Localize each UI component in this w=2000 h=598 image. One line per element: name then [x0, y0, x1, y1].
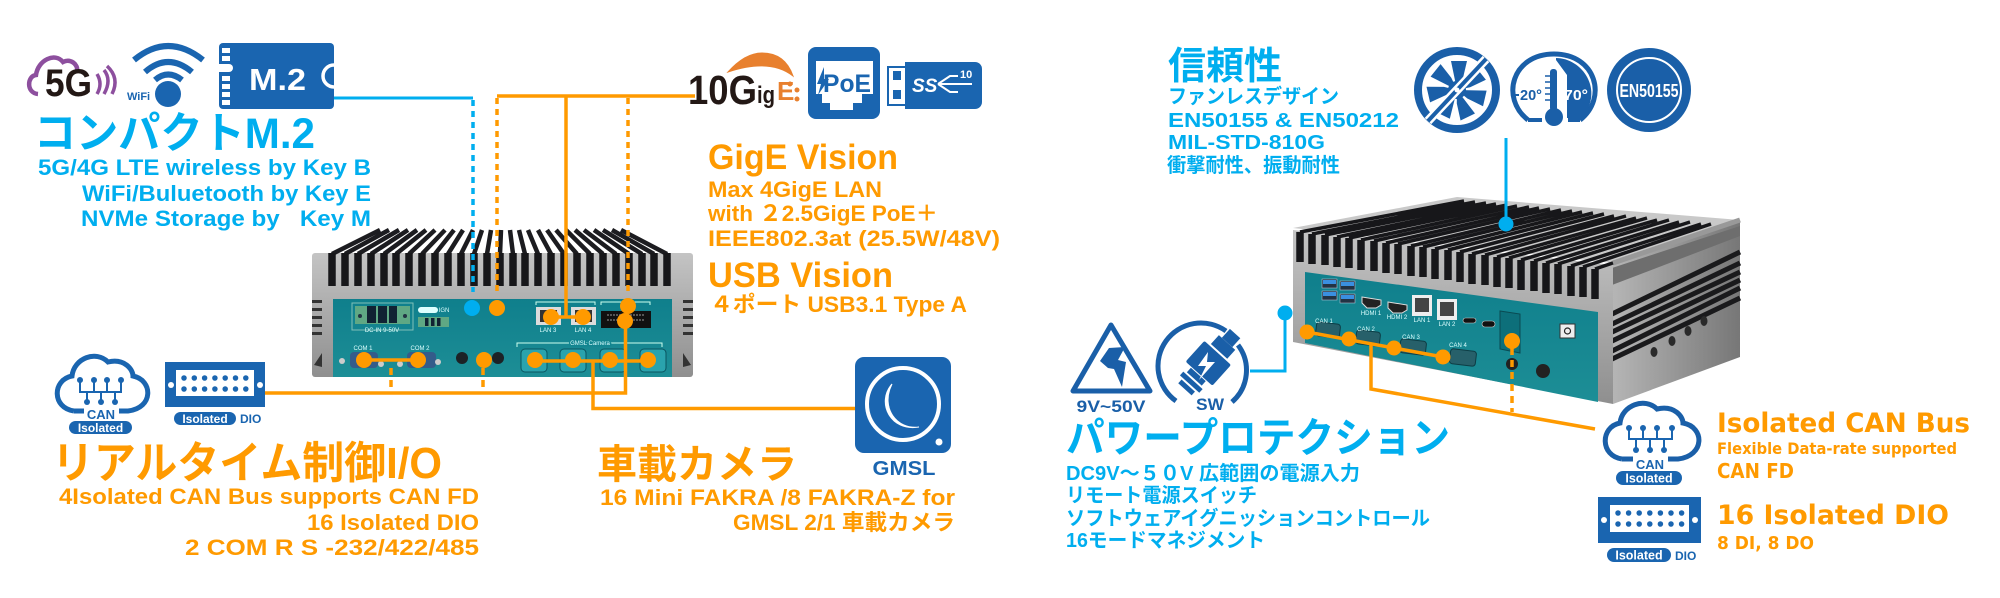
- text: power details: リモート電源スイッチ: [1066, 484, 1257, 507]
- text: IO details: [59, 484, 479, 560]
- text: reliability details: [1167, 84, 1399, 177]
- heading: automotive camera: 車載カメラ: [597, 443, 797, 487]
- icon: EN50155: [1607, 48, 1691, 132]
- icon: 5G: [29, 58, 115, 105]
- icon: USB 3: 10: [960, 69, 972, 81]
- buttons: [1506, 324, 1575, 378]
- LAN ports: [1412, 295, 1457, 320]
- GMSL ports: GMSL Camera: [570, 341, 611, 347]
- LAN ports: LAN 3: [540, 328, 557, 334]
- connector: CAN and DIO to right device: [1300, 324, 1595, 429]
- icon: temperature range: [1512, 54, 1595, 126]
- COM ports: COM 1: [353, 346, 373, 352]
- icon: 10GigE: E: [777, 76, 794, 106]
- icon: M.2 module: M.2: [249, 62, 306, 97]
- device side: [1613, 220, 1740, 404]
- device: right front view: CAN 1: [1315, 319, 1333, 325]
- icon: isolated CAN: Isolated: [78, 421, 123, 435]
- icon: isolated DIO: DIO: [240, 412, 261, 426]
- text: M.2 details: NVMe Storage by Key M: [81, 206, 371, 231]
- heading: real-time control IO: リアルタイム制御I/O: [52, 439, 442, 488]
- text: M.2 details: [38, 155, 371, 231]
- text: IO details: 2 COM R S -232/422/485: [185, 535, 479, 560]
- device: left rear view: [312, 230, 693, 377]
- device: right front view: LAN 2: [1439, 322, 1456, 328]
- icon: M.2 module: [219, 43, 334, 109]
- icon: isolated DIO: Isolated: [182, 412, 228, 426]
- icon: isolated CAN right: CAN: [1636, 457, 1664, 472]
- text: M.2 details: WiFi/Buluetooth by Key E: [82, 181, 371, 206]
- text: isolated DIO: 8 DI, 8 DO: [1717, 533, 1814, 554]
- text: USB details: ４ポート USB3.1 Type A: [710, 292, 967, 317]
- GMSL ports: [517, 341, 666, 372]
- text: isolated CAN bus: Flexible Data-rate supported: [1717, 439, 1957, 458]
- icon: software ignition switch: [1158, 322, 1248, 414]
- round buttons: [456, 352, 504, 364]
- ignition terminal: IGN: [439, 308, 449, 314]
- device: right front view: CAN 3: [1402, 335, 1420, 341]
- icon: voltage warning: 9V~50V: [1076, 397, 1146, 416]
- connector: real-time IO: [263, 321, 626, 393]
- text: camera details: [600, 485, 955, 535]
- icon: GMSL camera: [855, 357, 951, 480]
- connector: power to device: [1250, 306, 1292, 371]
- icon: isolated DIO right: Isolated: [1615, 548, 1663, 562]
- icon: 10GigE: 10G: [688, 67, 757, 113]
- ignition terminal: [418, 307, 449, 327]
- text: GigE details: Max 4GigE LAN: [708, 177, 882, 202]
- text: M.2 details: 5G/4G LTE wireless by Key B: [38, 155, 371, 180]
- text: reliability details: ファンレスデザイン: [1168, 84, 1339, 108]
- icon: fanless: [1418, 51, 1496, 129]
- text: IO details: 16 Isolated DIO: [307, 510, 479, 535]
- text: reliability details: MIL-STD-810G: [1168, 132, 1325, 154]
- icon: temperature range: 70°: [1564, 87, 1588, 104]
- device top surface: [1293, 197, 1740, 263]
- heading: GigE Vision: GigE Vision: [708, 138, 898, 177]
- device: right front view: CAN 2: [1357, 327, 1375, 333]
- LAN ports: [536, 302, 596, 334]
- icon: 5G: 5G: [45, 62, 92, 105]
- text: GigE details: with ２2.5GigE PoE＋: [707, 201, 938, 226]
- icon: isolated CAN right: Isolated: [1625, 472, 1673, 486]
- text: isolated CAN bus: CAN FD: [1717, 459, 1794, 483]
- heading: reliability: 信頼性: [1168, 46, 1282, 88]
- icon: 10GigE: ig: [757, 82, 775, 109]
- icon: isolated DIO right: [1598, 497, 1701, 563]
- text: reliability details: 衝撃耐性、振動耐性: [1167, 154, 1340, 177]
- connector: M.2 to device: [334, 98, 480, 316]
- text: power details: [1066, 462, 1430, 552]
- USB ports: [1322, 279, 1355, 303]
- LAN ports: LAN 4: [575, 328, 592, 334]
- icon: USB 3: SS: [912, 76, 938, 97]
- text: GigE details: IEEE802.3at (25.5W/48V): [708, 226, 1000, 251]
- CAN ports: [1315, 322, 1477, 367]
- icon: isolated CAN right: [1605, 403, 1699, 486]
- icon: isolated CAN: CAN: [87, 407, 115, 422]
- icon: GMSL camera: GMSL: [872, 458, 936, 480]
- text: power details: ソフトウェアイグニッションコントロール: [1066, 506, 1430, 530]
- text: camera details: GMSL 2/1 車載カメラ: [733, 510, 955, 535]
- connector: GMSL camera: [527, 352, 857, 408]
- icon: isolated CAN: [57, 356, 148, 435]
- icon: voltage warning: [1073, 325, 1150, 416]
- USB-C ports and slot: [1463, 311, 1520, 353]
- icon: software ignition switch: SW: [1196, 395, 1225, 414]
- text: isolated CAN bus: [1717, 408, 1970, 483]
- icon: PoE: [808, 47, 880, 119]
- icon: PoE: PoE: [823, 70, 871, 98]
- icon: isolated DIO right: DIO: [1675, 549, 1696, 563]
- text: IO details: 4Isolated CAN Bus supports CAN FD: [59, 484, 479, 509]
- heading: compact M.2: コンパクトM.2: [34, 110, 315, 158]
- device: right front view: LAN 1: [1414, 318, 1431, 324]
- connector: GigE to LAN and USB: [489, 96, 695, 329]
- text: power details: DC9V～５０V 広範囲の電源入力: [1066, 462, 1360, 485]
- connector: reliability to device: [1498, 138, 1514, 232]
- HDMI ports: [1362, 297, 1407, 313]
- device: right front view: HDMI 1: [1361, 311, 1382, 317]
- text: GigE details: [707, 177, 1000, 251]
- heading: USB Vision: USB Vision: [708, 256, 893, 295]
- power terminal: DC-IN 9-50V: [365, 328, 399, 334]
- device front: [1293, 230, 1613, 404]
- icon: temperature range: 20°: [1520, 87, 1542, 104]
- heat fins: [1300, 201, 1722, 299]
- text: isolated DIO: 16 Isolated DIO: [1717, 500, 1949, 531]
- icon: EN50155: EN50155: [1620, 81, 1678, 101]
- icon: isolated DIO: [165, 362, 265, 426]
- device: right front view: [1293, 197, 1740, 404]
- COM ports: [339, 346, 441, 368]
- COM ports: COM 2: [410, 346, 430, 352]
- device: right front view: HDMI 2: [1387, 315, 1408, 321]
- text: power details: 16モードマネジメント: [1066, 529, 1265, 552]
- icon: WiFi: WiFi: [127, 91, 150, 103]
- power terminal: [352, 303, 413, 334]
- text: isolated CAN bus: Isolated CAN Bus: [1717, 408, 1970, 439]
- icon: 10GigE: [688, 53, 800, 113]
- DIO port: [601, 302, 651, 328]
- text: camera details: 16 Mini FAKRA /8 FAKRA-Z for: [600, 485, 955, 510]
- text: reliability details: EN50155 & EN50212: [1168, 110, 1399, 132]
- icon: USB 3: [888, 62, 982, 109]
- icon: WiFi: [127, 46, 203, 107]
- I/O panel: [1305, 272, 1598, 402]
- text: isolated DIO: [1717, 500, 1949, 554]
- device: right front view: CAN 4: [1449, 343, 1467, 349]
- heading: power protection: パワープロテクション: [1066, 415, 1450, 461]
